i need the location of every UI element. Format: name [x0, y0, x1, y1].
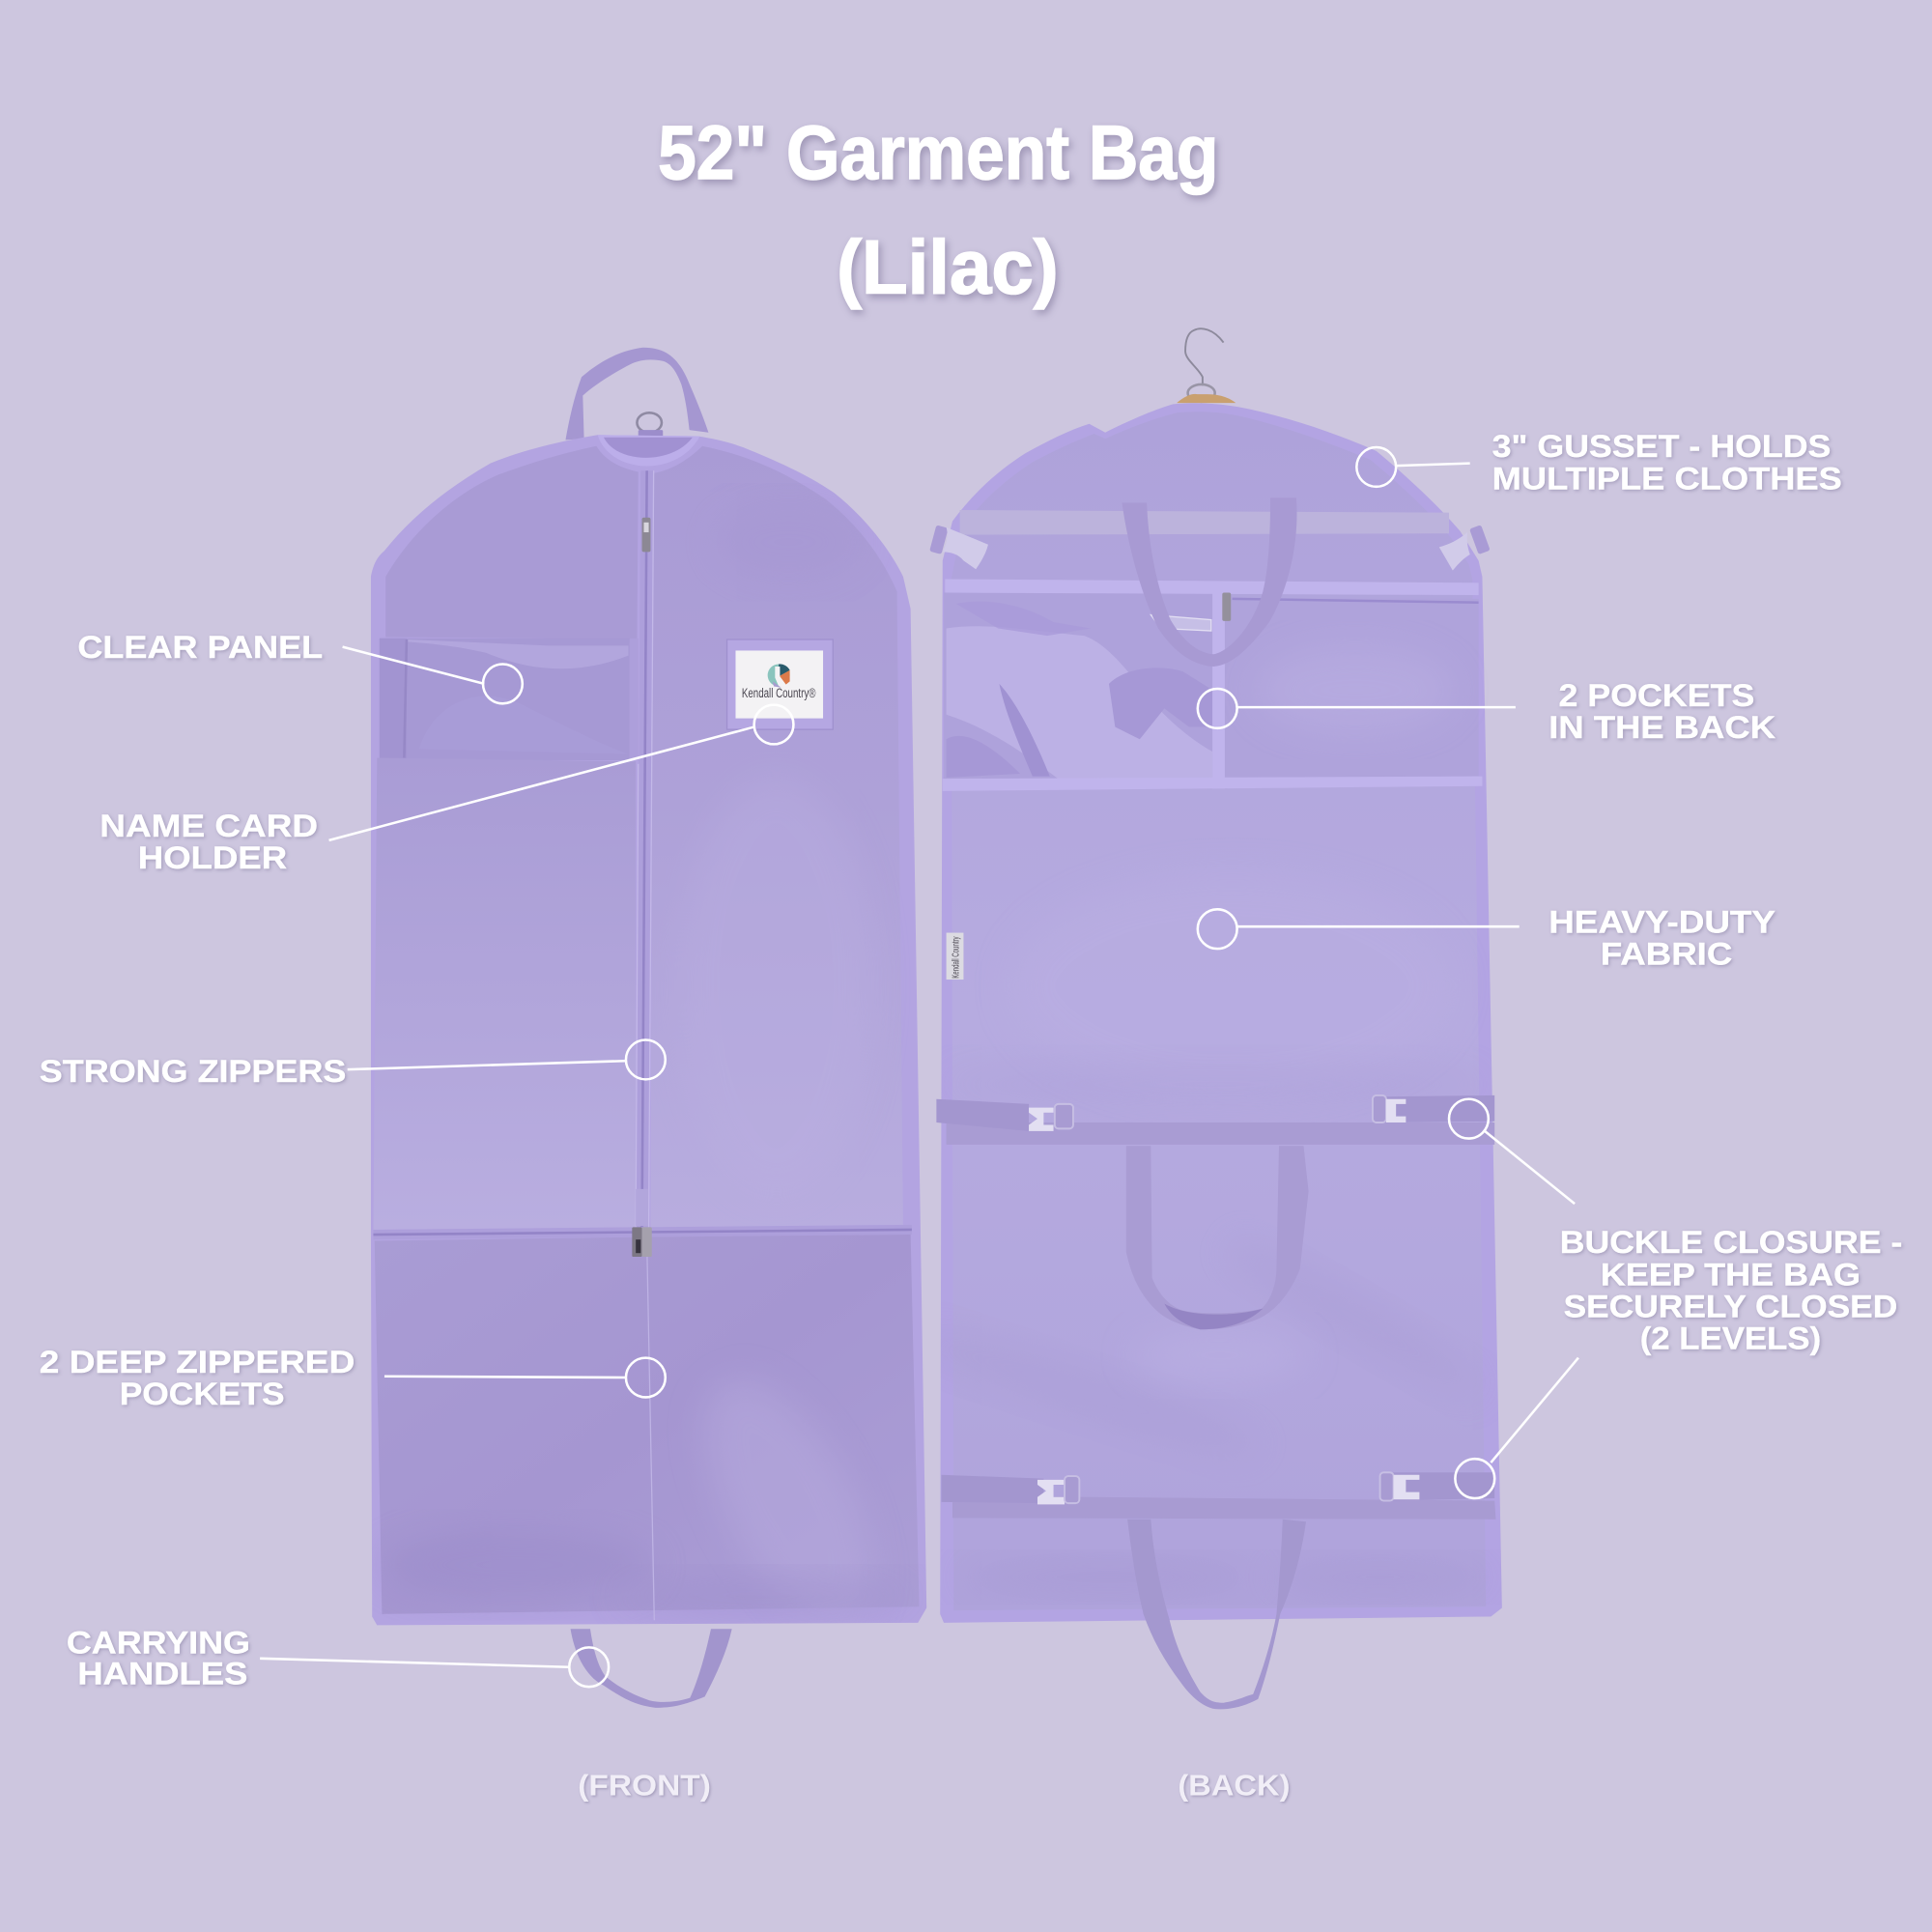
strap: upper closure [936, 1095, 1494, 1145]
icon: right buckle [1380, 1472, 1419, 1501]
icon: left buckle [1037, 1476, 1079, 1504]
icon: side logo tag [947, 933, 963, 980]
callout: name card holder: HOLDER [138, 840, 287, 875]
panel: clear pocket [944, 593, 1212, 780]
fabric shading [900, 875, 1495, 1595]
icon: top carry handle [565, 348, 708, 440]
callout: name card holder [99, 705, 793, 875]
callout: back pockets [1198, 678, 1776, 745]
callout: buckle closure: BUCKLE CLOSURE - [1560, 1225, 1902, 1260]
callout: clear panel [77, 630, 523, 703]
callout: deep zippered pockets: 2 DEEP ZIPPERED [40, 1345, 355, 1379]
back garment bag [900, 328, 1502, 1709]
icon: upper tote handles [1122, 497, 1297, 667]
panel: back fabric [952, 412, 1486, 1610]
caption: front: (FRONT) [578, 1769, 711, 1802]
callout: strong zippers: STRONG ZIPPERS [40, 1054, 346, 1089]
callout: carrying handles: HANDLES [77, 1657, 247, 1691]
callout: carrying handles [67, 1626, 609, 1691]
upper strap [960, 510, 1449, 535]
strap: lower closure [941, 1472, 1495, 1520]
neck opening [598, 435, 699, 466]
icon: bottom carrying handle [571, 1629, 732, 1708]
icon: pocket zipper [1222, 593, 1479, 621]
callout: back pockets: 2 POCKETS [1559, 678, 1754, 713]
icon: side logo tag: Kendall Country [951, 936, 961, 979]
name card holder [727, 639, 833, 729]
caption: back: (BACK) [1178, 1769, 1290, 1802]
icon: horizontal pocket zipper [373, 1225, 912, 1257]
icon: metal ring [637, 412, 663, 443]
callout: deep zippered pockets [40, 1345, 666, 1411]
callout: gusset: 3" GUSSET - HOLDS [1492, 429, 1831, 464]
callout: heavy-duty fabric: FABRIC [1601, 937, 1732, 972]
panel: zippered pocket [1224, 599, 1479, 779]
title [658, 109, 1218, 310]
callout: buckle closure: KEEP THE BAG [1601, 1257, 1861, 1292]
icon: left upper buckle [929, 525, 988, 569]
callout: deep zippered pockets: POCKETS [120, 1377, 285, 1411]
fabric shading [382, 505, 912, 1652]
icon: vertical zipper [636, 470, 654, 1233]
icon: right upper buckle [1439, 525, 1491, 571]
bag body [371, 435, 926, 1625]
icon: lower carrying handle [1127, 1520, 1306, 1709]
panel: upper right front [650, 446, 903, 1233]
icon: right buckle [1373, 1095, 1406, 1122]
icon: logo mark [768, 664, 790, 688]
callout: heavy-duty fabric: HEAVY-DUTY [1548, 905, 1776, 940]
callout: name card holder: NAME CARD [99, 809, 318, 843]
callout: gusset: MULTIPLE CLOTHES [1492, 461, 1842, 496]
bag body [940, 403, 1502, 1623]
panel: bottom zippered pockets [375, 1234, 920, 1614]
callout: carrying handles: CARRYING [67, 1626, 250, 1661]
front garment bag [371, 348, 926, 1708]
title: (Lilac) [837, 224, 1059, 310]
panel: clear window [380, 639, 639, 760]
callout: gusset [1356, 429, 1842, 496]
icon: left buckle [1029, 1104, 1073, 1131]
callout: strong zippers [40, 1040, 666, 1089]
callout: back pockets: IN THE BACK [1548, 710, 1776, 745]
panel: lower left front [373, 757, 636, 1230]
callout: clear panel: CLEAR PANEL [77, 630, 323, 665]
callout: buckle closure: (2 LEVELS) [1640, 1321, 1821, 1356]
callout: buckle closure [1449, 1099, 1902, 1498]
callout: buckle closure: SECURELY CLOSED [1564, 1290, 1897, 1324]
icon: middle tote handle [1126, 1146, 1309, 1329]
callout: heavy-duty fabric [1198, 905, 1776, 972]
name card holder: Kendall Country® [742, 686, 815, 700]
title: 52" Garment Bag [658, 109, 1218, 195]
pocket trims [943, 579, 1482, 791]
icon: hanger hook [1177, 328, 1236, 403]
panel: upper left flap [385, 446, 639, 643]
